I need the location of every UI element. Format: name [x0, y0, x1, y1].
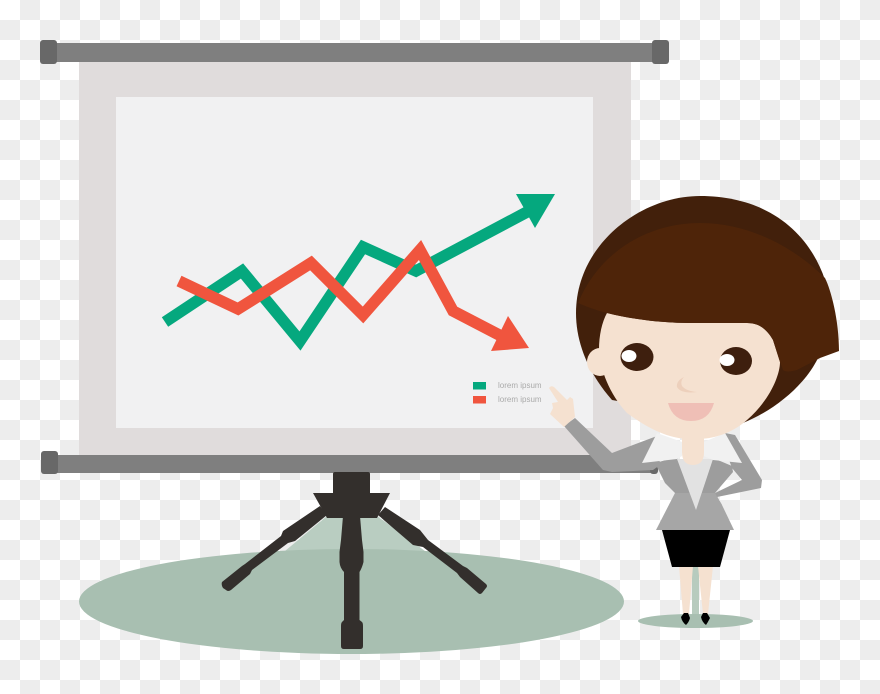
top roller bar [40, 40, 669, 64]
green rising line with arrow [165, 194, 555, 341]
collar [642, 433, 742, 463]
left eye [620, 343, 654, 371]
face [599, 313, 780, 439]
nose [677, 377, 697, 392]
skirt [662, 530, 730, 567]
arm on hip [715, 433, 762, 497]
floor shadow under tripod [79, 516, 624, 654]
neck [682, 430, 704, 465]
right eye [720, 347, 752, 375]
bottom roller bar [41, 451, 658, 474]
chart legend: lorem ipsum [498, 395, 542, 404]
pointing arm [564, 418, 660, 472]
tripod stand [222, 472, 487, 649]
presenter character [549, 196, 839, 625]
floor shadow under presenter [638, 566, 753, 628]
chart legend [473, 381, 542, 404]
chart legend: lorem ipsum [498, 381, 542, 390]
red falling line with arrow [179, 250, 529, 351]
legs [679, 566, 713, 614]
mouth [668, 403, 714, 421]
jacket [655, 457, 734, 530]
ear [587, 348, 613, 376]
projection screen [79, 60, 631, 456]
back hair [576, 196, 825, 423]
shoes [681, 613, 710, 625]
line chart [165, 194, 555, 351]
front hair [578, 223, 839, 372]
pointing hand [549, 386, 575, 427]
